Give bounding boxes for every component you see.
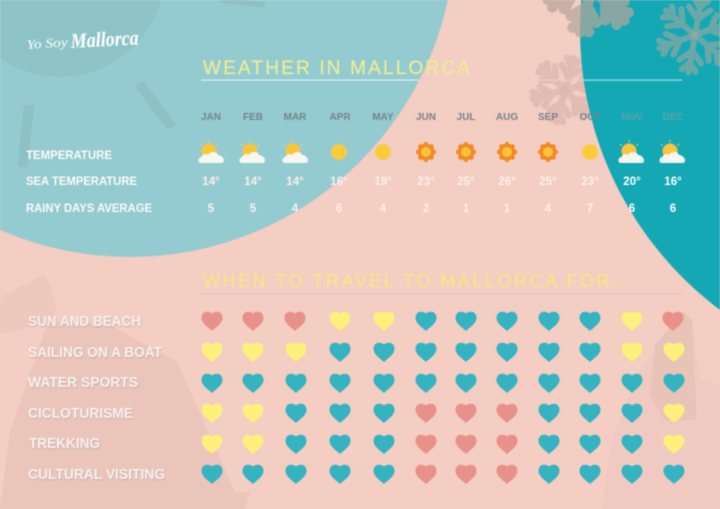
sea temperature values: 14°: [244, 176, 262, 188]
divider: when to travel: [201, 293, 682, 294]
hearts: cultural visiting: [202, 465, 684, 484]
activity labels: [28, 314, 165, 483]
sea temperature values: 25°: [539, 176, 557, 188]
month labels: AUG: [496, 112, 518, 123]
month labels: JAN: [201, 112, 221, 123]
sea temperature values: 14°: [286, 176, 304, 188]
decoration: dark teal circle: [580, 0, 720, 380]
sea temperature values: 16°: [330, 176, 348, 188]
hearts: trekking: [202, 435, 684, 454]
rainy day values: 4: [292, 203, 299, 215]
sea temperature values: 26°: [498, 176, 516, 188]
rainy day values: 6: [629, 203, 635, 215]
sea temperature values: 16°: [664, 176, 682, 188]
rainy day values: 7: [587, 203, 593, 215]
decoration: sailboat silhouette: [0, 275, 250, 509]
decoration: light teal circle: [0, 0, 455, 257]
rainy day values: 4: [545, 203, 552, 215]
month labels: SEP: [538, 112, 558, 123]
activity labels: CICLOTURISME: [28, 406, 133, 422]
row labels: weather: [26, 150, 152, 215]
weather icons: [198, 140, 685, 163]
decoration: snowflakes on teal: [536, 0, 720, 79]
sea temperature values: 20°: [623, 176, 641, 188]
rainy day values: 5: [208, 203, 215, 215]
month labels: JUL: [457, 112, 475, 123]
month labels: JUN: [416, 112, 436, 123]
month labels: OCT: [579, 112, 601, 123]
rainy day values: 4: [380, 203, 387, 215]
rainy day values: 2: [423, 203, 429, 215]
heading: when to travel: WHEN TO TRAVEL TO MALLORCA FOR...: [203, 271, 632, 291]
logo: [26, 25, 139, 53]
divider: weather: [201, 80, 682, 81]
row labels: weather: TEMPERATURE: [26, 150, 112, 162]
rainy day values: 1: [504, 203, 511, 215]
sea temperature values: 23°: [581, 176, 599, 188]
decoration: faded bars on teal: [18, 0, 265, 167]
sea temperature values: 25°: [457, 176, 475, 188]
sea temperature values: 23°: [417, 176, 435, 188]
rainy day values: 6: [336, 203, 342, 215]
activity labels: CULTURAL VISITING: [28, 467, 165, 483]
rainy day values: [208, 203, 676, 215]
activity labels: TREKKING: [29, 436, 100, 452]
rainy day values: 6: [670, 203, 676, 215]
sea temperature values: [202, 176, 682, 188]
hearts: sailing on a boat: [202, 343, 684, 362]
row labels: weather: SEA TEMPERATURE: [26, 176, 137, 188]
decoration: darker circle behind logo: [0, 0, 165, 77]
sea temperature values: 19°: [374, 176, 392, 188]
logo: Yo Soy: [26, 34, 68, 52]
activity labels: WATER SPORTS: [28, 375, 138, 391]
rainy day values: 5: [250, 203, 257, 215]
month labels: MAY: [372, 112, 394, 123]
month labels: [201, 112, 684, 123]
sea temperature values: 14°: [202, 176, 220, 188]
hearts: water sports: [202, 374, 684, 393]
month labels: DEC: [662, 112, 684, 123]
month labels: FEB: [243, 112, 263, 123]
hearts: cicloturisme: [202, 404, 684, 423]
decoration: snowflake on pink: [524, 49, 606, 131]
month labels: APR: [329, 112, 351, 123]
heart grid: [202, 312, 684, 484]
row labels: weather: RAINY DAYS AVERAGE: [26, 203, 152, 215]
month labels: NOV: [621, 112, 643, 123]
month labels: MAR: [284, 112, 307, 123]
decoration: faded tree on the right: [602, 312, 720, 509]
heading: weather: WEATHER IN MALLORCA: [203, 58, 470, 79]
logo: Mallorca: [69, 25, 139, 53]
rainy day values: 1: [463, 203, 470, 215]
activity labels: SUN AND BEACH: [28, 314, 141, 330]
hearts: sun and beach: [202, 312, 684, 331]
activity labels: SAILING ON A BOAT: [28, 345, 162, 361]
